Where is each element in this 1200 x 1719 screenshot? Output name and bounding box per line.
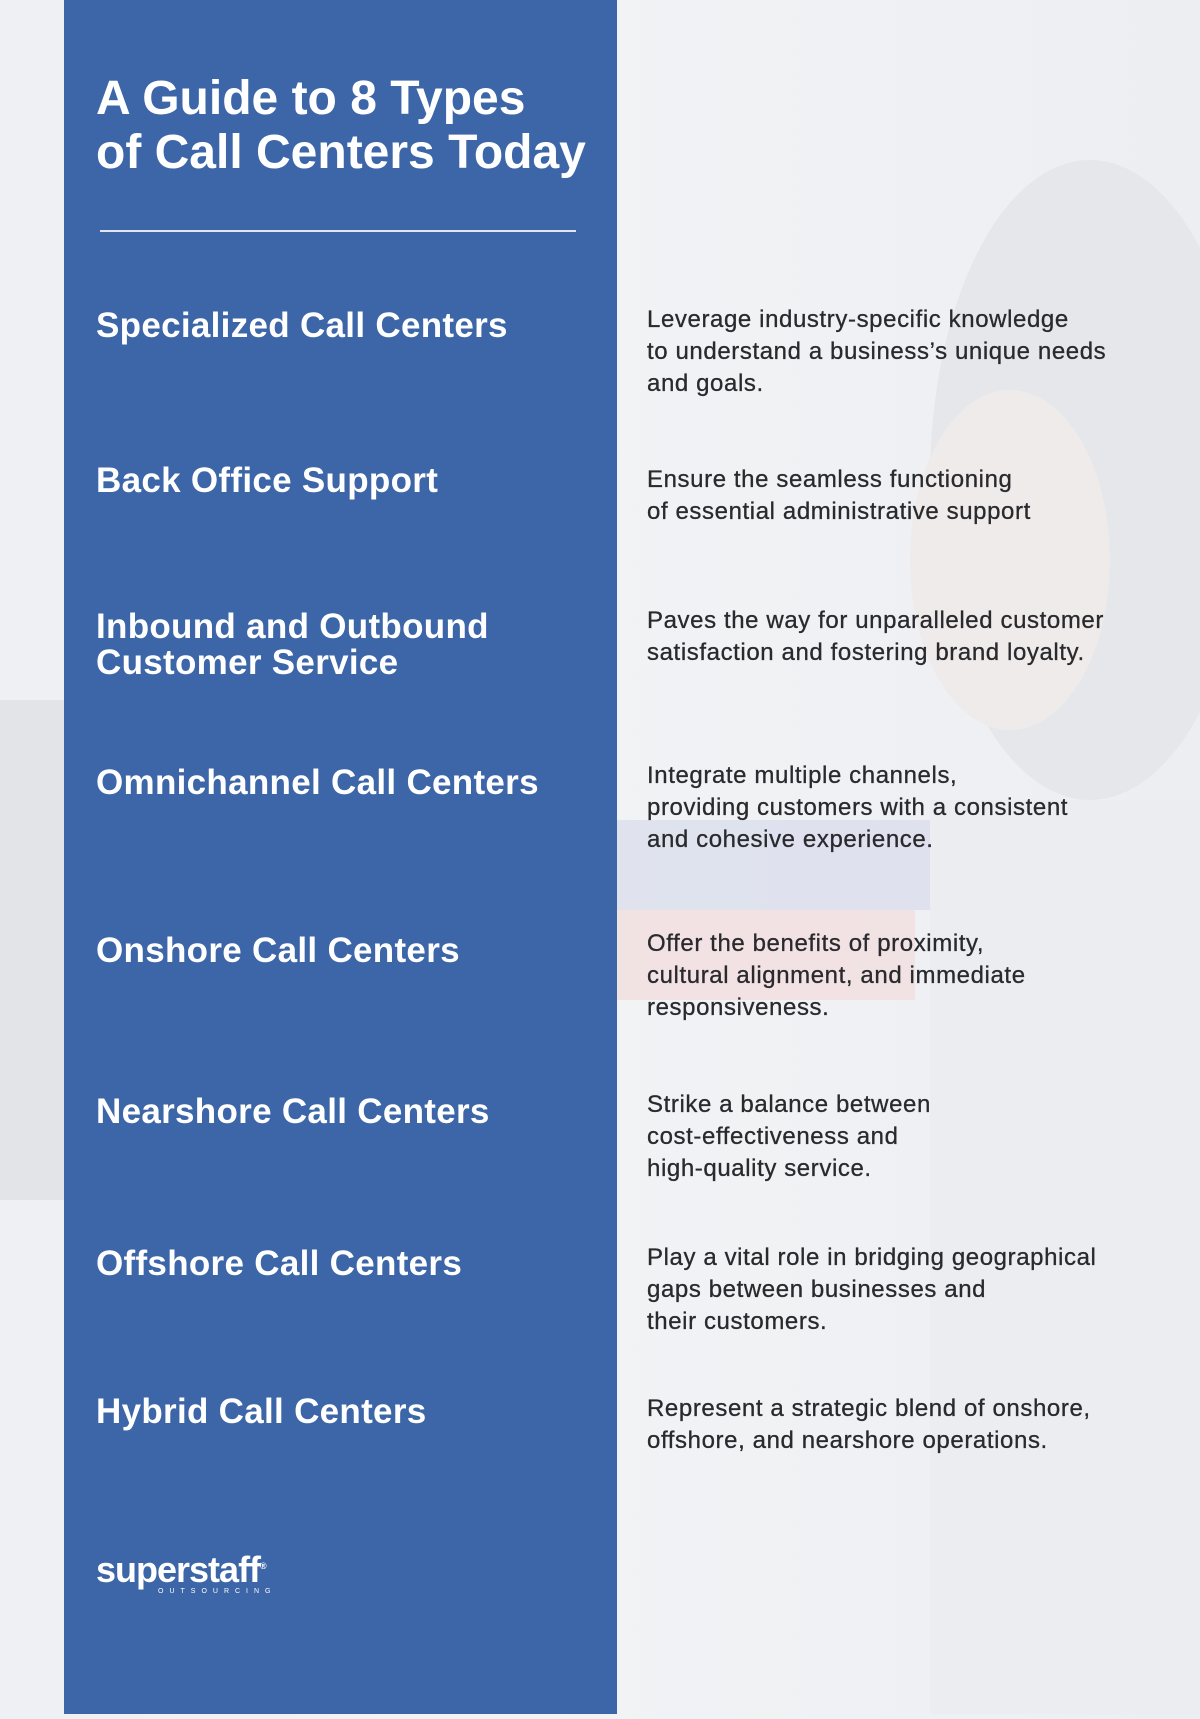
heading: inbound outbound: Inbound and Outbound [96,607,489,646]
text: omnichannel: providing customers with a consistent [647,794,1068,821]
text: onshore [647,930,1026,1021]
text: onshore: responsiveness. [647,994,829,1021]
heading: inbound outbound: Customer Service [96,643,398,682]
text: offshore [647,1244,1096,1335]
heading: offshore: Offshore Call Centers [96,1244,462,1283]
heading: nearshore: Nearshore Call Centers [96,1092,490,1131]
text: inbound outbound: satisfaction and fostering brand loyalty. [647,639,1085,666]
text: hybrid [647,1395,1091,1454]
text: offshore: Play a vital role in bridging geographical [647,1244,1096,1271]
text: offshore: their customers. [647,1308,827,1335]
title: of Call Centers Today [96,126,586,179]
text: specialized [647,306,1106,397]
text: nearshore: Strike a balance between [647,1091,931,1118]
heading: inbound outbound [96,607,489,682]
text: omnichannel: and cohesive experience. [647,826,934,853]
text: hybrid: offshore, and nearshore operations. [647,1427,1048,1454]
text: back office: Ensure the seamless functioning [647,466,1012,493]
text: nearshore: high-quality service. [647,1155,872,1182]
panel: blue left column [64,0,617,1714]
heading: hybrid: Hybrid Call Centers [96,1392,427,1431]
heading: onshore: Onshore Call Centers [96,931,460,970]
heading: omnichannel: Omnichannel Call Centers [96,763,539,802]
text: specialized: Leverage industry-specific knowledge [647,306,1069,333]
heading: specialized: Specialized Call Centers [96,306,508,345]
text: onshore: cultural alignment, and immediate [647,962,1026,989]
title [96,72,586,179]
text: onshore: Offer the benefits of proximity, [647,930,984,957]
logo: superstaff: OUTSOURCING [158,1588,276,1595]
text: nearshore [647,1091,931,1182]
text: specialized: to understand a business’s unique needs [647,338,1106,365]
text: back office [647,466,1031,525]
text: inbound outbound [647,607,1104,666]
title: A Guide to 8 Types [96,72,525,125]
logo: superstaff: superstaff® [96,1549,266,1590]
text: omnichannel [647,762,1068,853]
text: back office: of essential administrative support [647,498,1031,525]
text: offshore: gaps between businesses and [647,1276,986,1303]
text: specialized: and goals. [647,370,764,397]
text: inbound outbound: Paves the way for unparalleled customer [647,607,1104,634]
text: omnichannel: Integrate multiple channels, [647,762,957,789]
text: hybrid: Represent a strategic blend of onshore, [647,1395,1091,1422]
text: nearshore: cost-effectiveness and [647,1123,899,1150]
heading: back office: Back Office Support [96,461,438,500]
